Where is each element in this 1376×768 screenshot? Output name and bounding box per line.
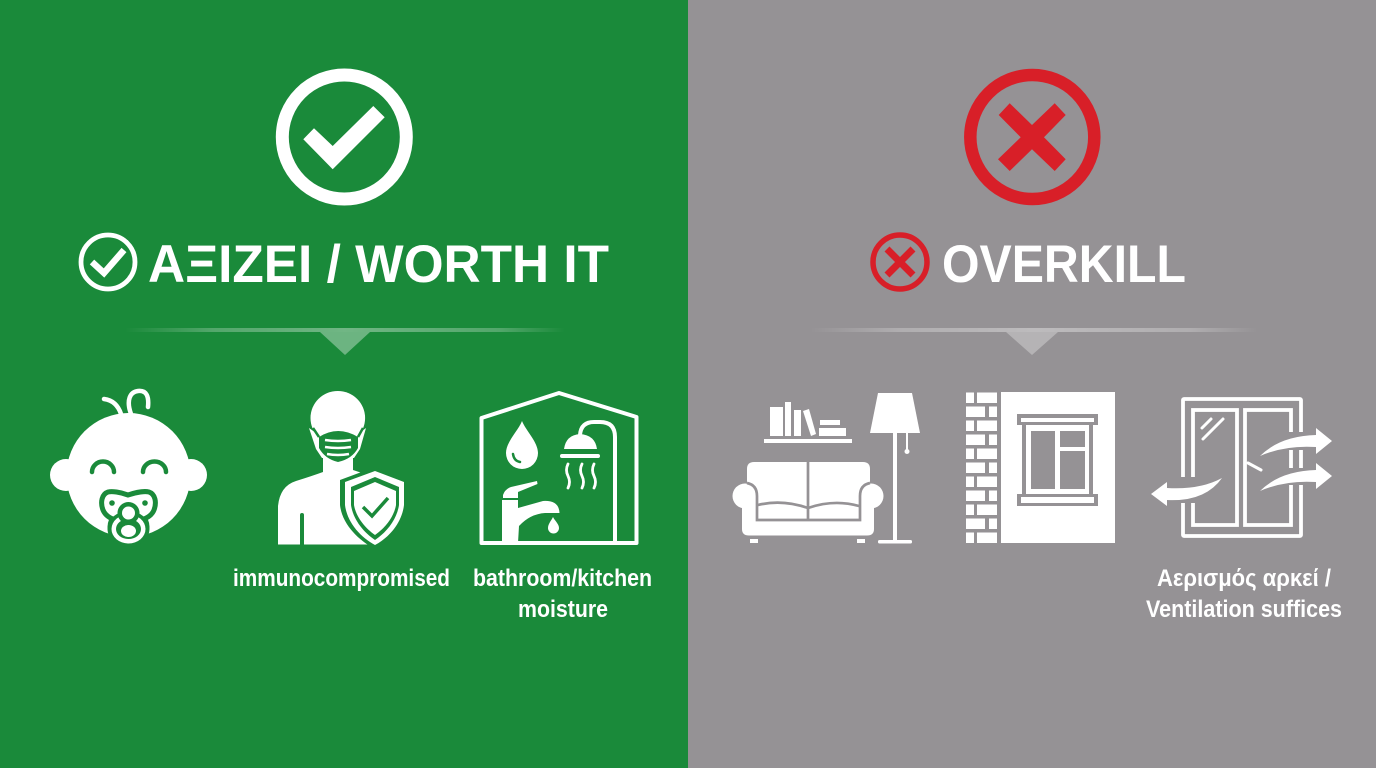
icon: large check circle (282, 75, 406, 199)
panel: worth it (0, 0, 688, 768)
divider with pointer (810, 328, 1258, 355)
label: ventilation suffices: Ventilation suffices (1146, 596, 1342, 623)
label: ventilation suffices (1146, 565, 1342, 623)
label: bathroom/kitchen moisture: bathroom/kitchen (473, 565, 652, 592)
icon: masked person with shield (278, 391, 407, 549)
heading text: overkill: OVERKILL (942, 235, 1186, 294)
label: ventilation suffices: Αερισμός αρκεί / (1157, 565, 1331, 592)
icon: baby with pacifier (50, 391, 207, 547)
label: bathroom/kitchen moisture (473, 565, 652, 623)
divider with pointer (125, 328, 565, 355)
icon: insulated brick wall with window (966, 392, 1115, 543)
icon: open window with airflow arrows (1151, 399, 1332, 536)
icon: small red cross circle (873, 235, 927, 289)
label: bathroom/kitchen moisture: moisture (518, 596, 608, 623)
icon: small check circle (81, 235, 135, 289)
heading: overkill (873, 235, 1186, 294)
icon: house with water and shower (482, 393, 636, 543)
icon: large red cross circle (970, 75, 1094, 199)
heading text: worth it: ΑΞΙΖΕΙ / WORTH IT (148, 235, 609, 294)
label: immunocompromised: immunocompromised (233, 565, 450, 592)
heading: worth it (81, 235, 609, 294)
panel: overkill (688, 0, 1376, 768)
icon: sofa, bookshelf and floor lamp (732, 393, 920, 544)
